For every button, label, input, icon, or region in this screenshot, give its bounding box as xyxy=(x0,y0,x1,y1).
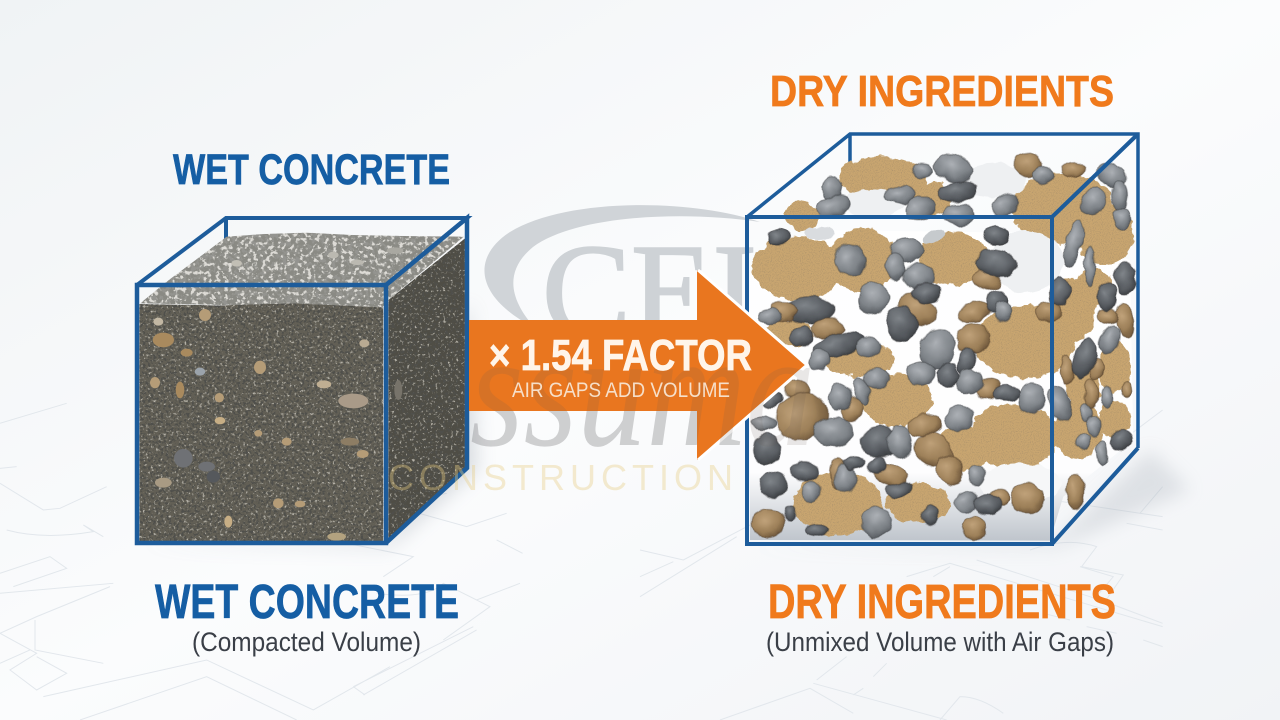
factor text: × 1.54 FACTOR xyxy=(489,331,752,380)
compacted volume note: (Compacted Volume) xyxy=(192,627,421,657)
panel: dry ingredients cube xyxy=(747,134,1190,548)
sand heaps xyxy=(752,157,1133,535)
heading: dry ingredients top: DRY INGREDIENTS xyxy=(770,67,1114,116)
panel: wet concrete cube xyxy=(137,218,478,548)
arrow with factor label xyxy=(469,270,815,481)
unmixed volume note: (Unmixed Volume with Air Gaps) xyxy=(766,627,1114,657)
caption: dry ingredients xyxy=(766,576,1116,657)
concrete side face xyxy=(388,238,465,540)
caption: wet concrete xyxy=(155,576,459,657)
white lime chunks xyxy=(843,163,1063,503)
watermark: script word below arrow: ssuma xyxy=(470,298,815,481)
cube shadow xyxy=(747,450,1190,548)
cube front frame xyxy=(747,134,1138,544)
cube front frame xyxy=(137,218,467,543)
cube back edges xyxy=(137,218,467,285)
cube shadow xyxy=(137,300,478,548)
brown pebbles xyxy=(752,153,1137,541)
wet concrete label: WET CONCRETE xyxy=(155,576,459,629)
dry ingredients label: DRY INGREDIENTS xyxy=(768,576,1116,629)
watermark script over arrow: ssuma xyxy=(470,298,815,481)
heading: wet concrete top: WET CONCRETE xyxy=(173,146,450,194)
blueprint floor plan lines, right xyxy=(640,410,1163,720)
white air gaps xyxy=(750,230,1133,541)
cube back edges xyxy=(747,134,1138,448)
arrow shape xyxy=(469,270,806,460)
aggregate pebbles in concrete xyxy=(150,247,403,541)
concrete block xyxy=(139,233,465,543)
concrete top face xyxy=(140,233,464,308)
factor subtext: AIR GAPS ADD VOLUME xyxy=(512,379,730,402)
concrete front face xyxy=(139,303,383,543)
grey stones xyxy=(749,149,1135,542)
arrow head highlight edge xyxy=(698,270,807,460)
blueprint floor plan lines, left xyxy=(0,403,523,720)
watermark: construction line: CONSTRUCTION xyxy=(388,457,733,498)
aggregate pile xyxy=(749,149,1137,542)
watermark: swoosh and CEI letters: CEI xyxy=(542,217,757,365)
